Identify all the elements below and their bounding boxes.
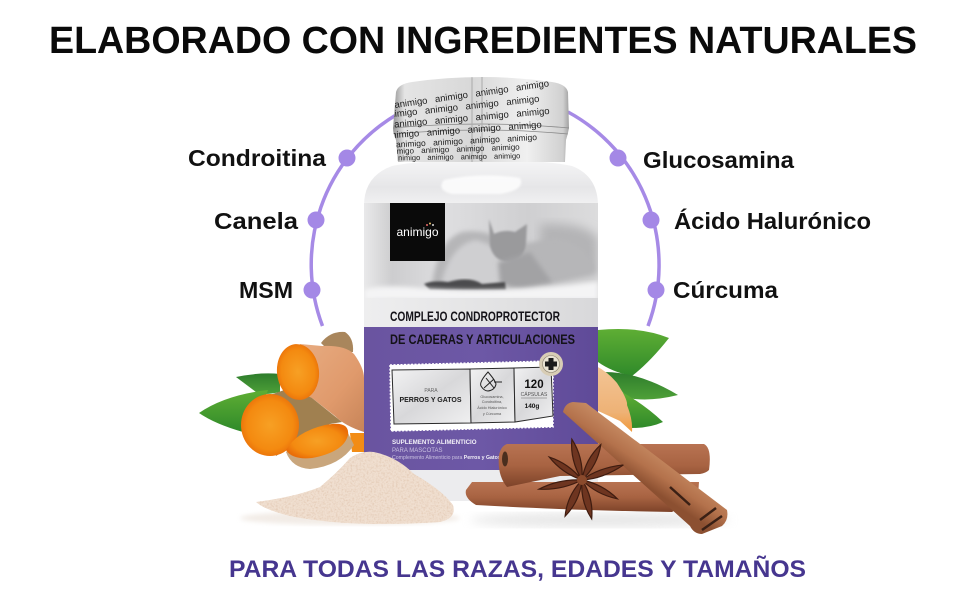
lid: animigo animigo animigo animigo xyxy=(394,106,550,130)
stamp info box: PERROS Y GATOS xyxy=(399,397,462,404)
cinnamon sticks xyxy=(466,402,730,534)
label photo band xyxy=(364,203,598,298)
upper cut face xyxy=(274,342,322,402)
label: Canela xyxy=(214,208,324,234)
supplement text: PARA MASCOTAS xyxy=(392,448,442,454)
slice xyxy=(286,433,354,469)
label: Glucosamina: Glucosamina xyxy=(643,147,794,173)
shoulder highlight xyxy=(441,175,521,194)
stamp info box: CÁPSULAS xyxy=(521,391,548,398)
stamp info box: Ácido Hialurónico xyxy=(477,406,507,410)
bottle shoulder xyxy=(364,160,598,206)
knob xyxy=(321,332,353,352)
lid: animigo animigo animigo animigo xyxy=(396,132,537,149)
purple label xyxy=(364,327,598,470)
black logo box xyxy=(390,203,445,261)
ingredient ring arc xyxy=(311,112,659,326)
diagonal stick xyxy=(563,402,727,534)
label: Cúrcuma: Cúrcuma xyxy=(673,277,778,303)
supplement text xyxy=(392,439,501,461)
stamp info box: PARA xyxy=(424,388,438,394)
diagonal stick ends xyxy=(670,487,722,530)
stamp info box: 120 xyxy=(524,379,544,391)
stamp info box: Glucosamina, xyxy=(480,395,504,399)
star anise xyxy=(538,438,624,520)
product name: DE CADERAS Y ARTICULACIONES xyxy=(390,331,575,347)
silver title band xyxy=(364,298,598,327)
product name xyxy=(390,308,575,347)
product bottle xyxy=(364,74,598,501)
stamp info box xyxy=(390,361,553,431)
lower root body xyxy=(270,388,342,456)
product name: COMPLEJO CONDROPROTECTOR xyxy=(390,308,560,324)
dog and cat photo xyxy=(364,219,598,300)
bottle base xyxy=(364,470,598,501)
lid: animigo animigo animigo animigo xyxy=(394,151,520,163)
powder pile xyxy=(240,452,460,525)
seal badge xyxy=(539,352,563,376)
footer tagline: PARA TODAS LAS RAZAS, EDADES Y TAMAÑOS xyxy=(229,555,806,583)
stamp info box: y Cúrcuma xyxy=(483,412,502,416)
supplement text: SUPLEMENTO ALIMENTICIO xyxy=(392,439,477,446)
turmeric root xyxy=(241,332,364,469)
stamp info box: Condroitina, xyxy=(482,400,502,404)
upper root body xyxy=(290,344,364,432)
label: Ácido Halurónico: Ácido Halurónico xyxy=(674,207,871,234)
lower cut face xyxy=(241,394,299,456)
label: MSM: MSM xyxy=(239,277,293,303)
upper stick xyxy=(499,444,710,487)
title: ELABORADO CON INGREDIENTES NATURALES xyxy=(49,20,917,62)
small piece xyxy=(350,433,364,452)
stamp info box: 140g xyxy=(525,403,539,410)
black logo box: animigo xyxy=(396,225,439,239)
left leaves xyxy=(199,373,280,432)
lid xyxy=(393,77,569,162)
label: Condroitina: Condroitina xyxy=(188,145,326,171)
lid: animigo animigo animigo animigo xyxy=(384,94,540,121)
lid: animigo animigo animigo animigo xyxy=(386,143,520,156)
label: MSM xyxy=(239,277,320,303)
right leaves and root behind bottle xyxy=(596,329,678,432)
supplement text: Complemento Alimenticio para Perros y Gatos xyxy=(392,455,501,461)
label: Canela: Canela xyxy=(214,208,298,234)
stick hollow end xyxy=(502,452,508,466)
lid: animigo animigo animigo animigo xyxy=(394,78,550,111)
lid: animigo animigo animigo animigo xyxy=(386,120,542,142)
icon: drop xyxy=(481,372,502,391)
lower stick xyxy=(466,482,699,512)
shadow xyxy=(470,513,730,527)
